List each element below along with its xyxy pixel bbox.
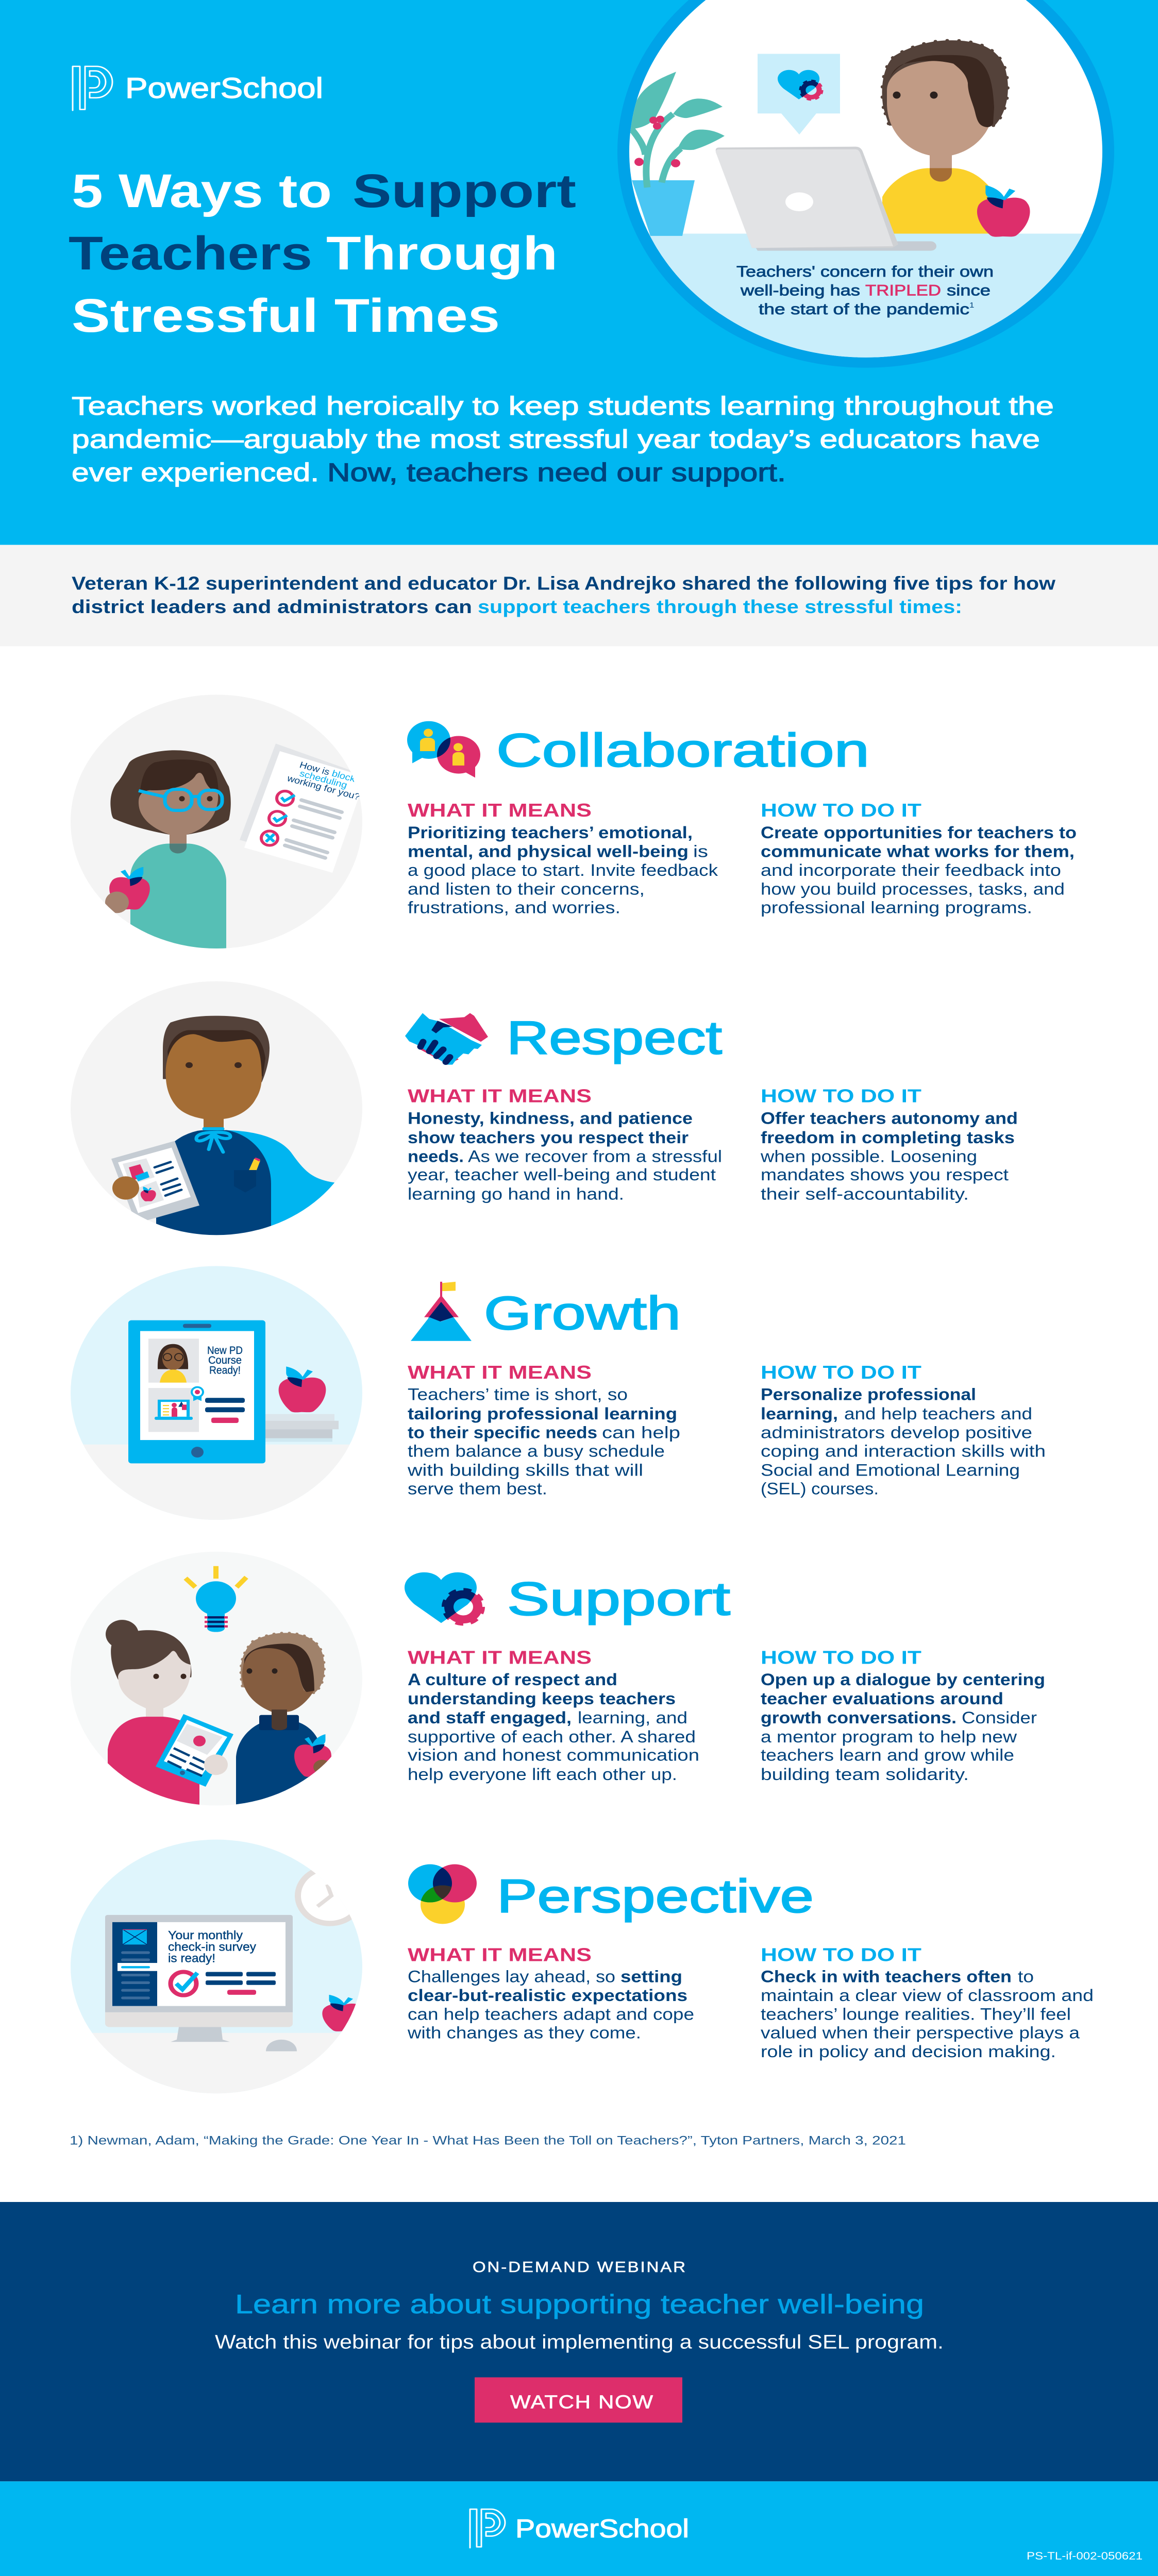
how to do it: Create opportunities for teachers to — [761, 824, 1077, 842]
speech bubble with heart and gear — [758, 54, 840, 134]
tablet — [128, 1320, 265, 1463]
panel: teacher at laptop circle — [617, 0, 1114, 368]
tablet — [111, 1141, 199, 1224]
what it means: show teachers you respect their — [408, 1129, 689, 1147]
how to do it: to — [1018, 1968, 1034, 1986]
what it means: needs. — [408, 1148, 464, 1166]
caption: tripled statistic: the start of the pandemic — [759, 300, 969, 318]
document code: PS-TL-if-002-050621 — [1027, 2550, 1143, 2562]
what it means: frustrations, and worries. — [408, 899, 620, 917]
title: Teachers — [69, 227, 312, 280]
how to do it: teachers learn and grow while — [761, 1747, 1014, 1765]
lightbulb — [186, 1566, 246, 1632]
what it means: help everyone lift each other up. — [408, 1766, 677, 1784]
caption: tripled statistic: well-being has — [740, 282, 860, 299]
teacher figure — [105, 750, 231, 987]
course text — [207, 1344, 243, 1376]
button: watch now — [475, 2377, 682, 2422]
caption: tripled statistic: since — [947, 282, 991, 299]
icon: apple — [977, 185, 1030, 237]
eyebrow: ON-DEMAND WEBINAR — [473, 2259, 685, 2275]
survey paper: How is block — [298, 759, 357, 784]
male teacher — [236, 1633, 350, 1812]
heading: Support — [507, 1573, 730, 1625]
caption: tripled statistic: 1 — [969, 301, 975, 310]
title: 5 Ways to — [72, 165, 332, 217]
what it means: them balance a busy schedule — [408, 1442, 665, 1461]
icon: apple in hand — [109, 867, 150, 910]
what it means: clear-but-realistic expectations — [408, 1987, 687, 2005]
survey text: check-in survey — [168, 1940, 256, 1954]
clock — [298, 1868, 362, 1923]
icon: overlapping circles — [408, 1865, 477, 1924]
what it means: tailoring professional learning — [408, 1405, 677, 1423]
icon: apple — [322, 1995, 365, 2031]
band text: Veteran K-12 superintendent and educator Dr. Lisa Andrejko shared the following five tips for how — [72, 573, 1055, 594]
how to do it: communicate what works for them, — [761, 843, 1075, 861]
what it means: mental, and physical well-being — [408, 843, 689, 861]
what it means: learning go hand in hand. — [408, 1185, 624, 1204]
icon: handshake — [405, 1013, 488, 1065]
teacher figure — [882, 40, 1008, 234]
what it means — [408, 1086, 722, 1204]
footnote: 1) Newman, Adam, “Making the Grade: One Year In - What Has Been the Toll on Teachers?”, Tyton Partners, March 3, 2021 — [70, 2133, 906, 2147]
caption: tripled statistic — [736, 263, 994, 318]
webinar heading: Learn more about supporting teacher well-being — [235, 2289, 924, 2319]
how to do it: Check in with teachers often — [761, 1968, 1012, 1986]
button: watch now: WATCH NOW — [510, 2392, 653, 2413]
caption: tripled statistic: TRIPLED — [865, 282, 941, 299]
intro paragraph — [72, 393, 1054, 487]
survey paper — [240, 743, 366, 873]
how to do it: growth conversations. — [761, 1709, 956, 1727]
footer logo — [470, 2509, 689, 2548]
course photo — [148, 1338, 199, 1383]
what it means: Prioritizing teachers’ emotional, — [408, 824, 693, 842]
webinar description: Watch this webinar for tips about implementing a successful SEL program. — [215, 2331, 944, 2353]
title — [69, 165, 576, 342]
check mark — [171, 1972, 197, 1995]
how to do it: HOW TO DO IT — [761, 1086, 921, 1107]
what it means: supportive of each other. A shared — [408, 1728, 696, 1746]
desktop monitor — [105, 1915, 293, 2042]
how to do it: and incorporate their feedback into — [761, 861, 1061, 879]
intro paragraph: Teachers worked heroically to keep students learning throughout the — [72, 393, 1054, 420]
what it means: setting — [620, 1968, 682, 1986]
how to do it: (SEL) courses. — [761, 1480, 879, 1498]
what it means: a good place to start. Invite feedback — [408, 861, 718, 879]
how to do it: coping and interaction skills with — [761, 1442, 1046, 1461]
what it means: Teachers’ time is short, so — [408, 1386, 628, 1404]
what it means — [407, 1944, 694, 2042]
course text: New PD — [207, 1344, 243, 1357]
heading: Perspective — [497, 1870, 814, 1922]
what it means: is — [693, 843, 708, 861]
panel: collaboration — [71, 694, 1077, 987]
icon: mountain with flag — [411, 1282, 472, 1341]
how to do it: their self-accountability. — [761, 1185, 969, 1204]
how to do it: a mentor program to help new — [761, 1728, 1017, 1746]
glasses — [139, 789, 222, 810]
what it means: with changes as they come. — [407, 2024, 641, 2042]
survey text — [168, 1929, 256, 1965]
panel: webinar call to action — [0, 2202, 1158, 2481]
illustration: teacher with survey — [71, 694, 366, 987]
how to do it: when possible. Loosening — [760, 1148, 977, 1166]
course text: Course — [208, 1354, 242, 1366]
illustration: tablet with PD course — [67, 1266, 366, 1525]
how to do it: role in policy and decision making. — [761, 2043, 1056, 2061]
how to do it — [760, 1086, 1018, 1204]
how to do it: HOW TO DO IT — [761, 1944, 921, 1965]
how to do it: professional learning programs. — [761, 899, 1032, 917]
video lesson thumbnail — [148, 1388, 199, 1432]
books — [265, 1414, 339, 1442]
what it means — [408, 800, 718, 917]
what it means: serve them best. — [408, 1480, 547, 1498]
icon: P mark — [470, 2509, 505, 2548]
how to do it: Social and Emotional Learning — [761, 1462, 1020, 1480]
survey text: Your monthly — [168, 1928, 243, 1942]
what it means: understanding keeps teachers — [408, 1690, 676, 1708]
illustration: monthly check-in on monitor — [67, 1840, 366, 2096]
what it means: WHAT IT MEANS — [408, 1362, 592, 1383]
how to do it: teacher evaluations around — [761, 1690, 1003, 1708]
how to do it: HOW TO DO IT — [761, 1647, 921, 1668]
what it means: with building skills that will — [407, 1462, 643, 1480]
intro paragraph: pandemic—arguably the most stressful year today’s educators have — [72, 426, 1040, 454]
how to do it: mandates shows you respect — [761, 1166, 1009, 1184]
heading: Growth — [484, 1287, 681, 1340]
ribbon bow — [196, 1129, 230, 1152]
panel: perspective — [67, 1840, 1094, 2096]
what it means: vision and honest communication — [408, 1747, 699, 1765]
title: Support — [353, 165, 576, 217]
intro paragraph: ever experienced. — [72, 459, 319, 487]
icon: apple in hand — [294, 1734, 331, 1777]
how to do it: administrators develop positive — [761, 1424, 1032, 1442]
how to do it — [761, 800, 1077, 917]
computer mouse — [266, 2040, 297, 2052]
tablet — [156, 1714, 233, 1787]
band text: district leaders and administrators can — [72, 597, 472, 617]
what it means: A culture of respect and — [408, 1671, 617, 1689]
header background — [0, 0, 1158, 545]
icon: heart and gear — [405, 1572, 482, 1623]
what it means: Challenges lay ahead, so — [408, 1968, 615, 1986]
caption: tripled statistic: Teachers' concern for their own — [736, 263, 994, 280]
heading: Collaboration — [496, 724, 869, 776]
icon: heart and gear — [778, 70, 822, 99]
panel: growth — [67, 1266, 1046, 1525]
what it means: year, teacher well-being and student — [408, 1166, 716, 1184]
how to do it: maintain a clear view of classroom and — [761, 1987, 1094, 2005]
pocket and pencil — [234, 1158, 260, 1193]
what it means — [407, 1362, 680, 1498]
how to do it: Personalize professional — [761, 1386, 976, 1404]
what it means: WHAT IT MEANS — [408, 1944, 592, 1965]
heading: Respect — [507, 1012, 722, 1064]
how to do it: and help teachers and — [844, 1405, 1032, 1423]
what it means: learning, and — [578, 1709, 687, 1727]
icon: envelope — [123, 1929, 147, 1944]
female teacher — [106, 1620, 199, 1812]
how to do it: Offer teachers autonomy and — [761, 1110, 1018, 1128]
what it means: WHAT IT MEANS — [408, 800, 592, 821]
how to do it: teachers’ lounge realities. They’ll feel — [761, 2006, 1071, 2024]
band text: support teachers through these stressful times: — [478, 597, 962, 617]
what it means — [408, 1647, 699, 1784]
how to do it: freedom in completing tasks — [761, 1129, 1015, 1147]
what it means: Honesty, kindness, and patience — [408, 1110, 693, 1128]
how to do it: HOW TO DO IT — [761, 800, 921, 821]
icon: award ribbon — [191, 1386, 204, 1401]
panel: respect — [71, 981, 1018, 1256]
how to do it — [761, 1944, 1094, 2061]
what it means: WHAT IT MEANS — [408, 1086, 592, 1107]
illustration: caped teacher with tablet — [71, 981, 366, 1256]
survey paper: scheduling — [298, 768, 349, 790]
panel: intro band — [0, 545, 1158, 646]
what it means: can help — [602, 1424, 680, 1442]
title: Through — [326, 227, 558, 280]
how to do it: HOW TO DO IT — [761, 1362, 921, 1383]
panel: support — [71, 1552, 1045, 1812]
what it means: can help teachers adapt and cope — [408, 2006, 694, 2024]
what it means: and listen to their concerns, — [408, 880, 645, 899]
band text — [72, 573, 1055, 617]
title: Stressful Times — [72, 290, 500, 342]
icon: P mark — [73, 66, 112, 110]
how to do it: Open up a dialogue by centering — [761, 1671, 1045, 1689]
what it means: and staff engaged, — [408, 1709, 572, 1727]
laptop — [716, 147, 936, 251]
illustration: two teachers with idea — [71, 1552, 362, 1812]
logo: PowerSchool — [73, 66, 323, 110]
course text: Ready! — [209, 1364, 241, 1376]
logo wordmark: PowerSchool — [125, 72, 323, 104]
how to do it — [761, 1647, 1045, 1784]
icon: speech bubbles — [407, 721, 480, 777]
how to do it: how you build processes, tasks, and — [761, 880, 1065, 899]
panel: footer — [0, 2481, 1158, 2576]
icon: potted plant — [630, 72, 725, 236]
how to do it: building team solidarity. — [761, 1766, 969, 1784]
how to do it: learning, — [761, 1405, 838, 1423]
intro paragraph: Now, teachers need our support. — [327, 459, 786, 487]
what it means: WHAT IT MEANS — [408, 1647, 592, 1668]
survey text: is ready! — [168, 1952, 215, 1965]
how to do it — [761, 1362, 1046, 1498]
icon: apple — [279, 1366, 326, 1412]
what it means: As we recover from a stressful — [468, 1148, 722, 1166]
how to do it: valued when their perspective plays a — [761, 2024, 1080, 2042]
how to do it: Consider — [962, 1709, 1037, 1727]
footer wordmark: PowerSchool — [515, 2515, 689, 2543]
what it means: to their specific needs — [408, 1424, 597, 1442]
survey paper: working for you? — [286, 773, 362, 802]
